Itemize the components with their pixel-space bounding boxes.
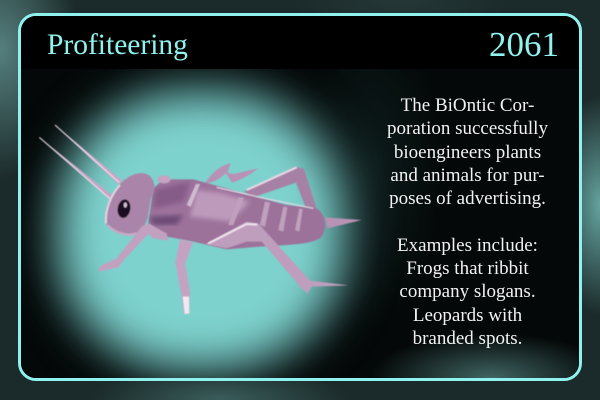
antennae [39, 125, 122, 201]
middle leg [175, 239, 193, 314]
front leg [98, 223, 168, 272]
portrait glow [21, 69, 579, 378]
tail spike [325, 217, 362, 228]
title: Profiteering [47, 29, 188, 61]
hind leg [205, 222, 348, 293]
head [105, 173, 155, 235]
description text: Frogs that ribbit [406, 258, 529, 279]
header bar [21, 16, 579, 69]
description text [387, 95, 548, 349]
description text: and animals for pur- [390, 165, 545, 186]
description text: branded spots. [413, 328, 522, 349]
eye [116, 198, 132, 219]
abdomen and thorax [148, 175, 325, 249]
description text: poration successfully [387, 118, 548, 139]
far legs [205, 163, 317, 210]
description text: bioengineers plants [394, 142, 541, 163]
description text: poses of advertising. [389, 188, 546, 209]
description text: company slogans. [399, 281, 536, 302]
year: 2061 [489, 25, 559, 64]
description text: Leopards with [413, 305, 522, 326]
description text: Examples include: [397, 235, 538, 256]
description text: The BiOntic Cor- [401, 95, 534, 116]
